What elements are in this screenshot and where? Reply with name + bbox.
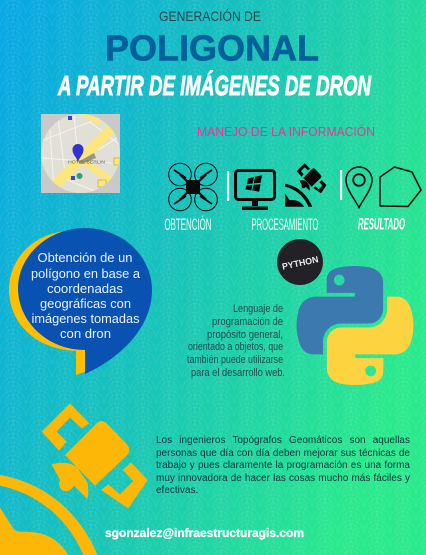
- callout text: polígono en base a: [31, 267, 140, 281]
- paragraph: ingenieros topógrafos: muy innovadora de hacer las cosas mucho más fáciles y: [156, 473, 410, 484]
- map image with location pin: HOTEL BERLIN: [68, 160, 105, 164]
- icon: monitor with windows logo: [236, 170, 274, 210]
- paragraph: ingenieros topógrafos: [156, 435, 410, 496]
- contact email: sgonzalez@infraestructuragis.com: [105, 528, 304, 540]
- python description: [187, 303, 285, 379]
- python description: orientado a objetos, que: [188, 341, 283, 353]
- python description: para el desarrollo web.: [191, 367, 285, 379]
- icon: drone: [169, 163, 217, 211]
- title: poligonal: POLIGONAL: [105, 28, 319, 68]
- python description: también puede utilizarse: [187, 354, 283, 366]
- icon: python logo: [297, 266, 413, 385]
- callout text: Obtención de un: [38, 251, 133, 265]
- callout text: con dron: [60, 327, 111, 341]
- paragraph: ingenieros topógrafos: Los ingenieros Topógrafos Geomáticos son aquellas: [156, 435, 410, 446]
- divider: [227, 171, 229, 201]
- infographic canvas: PROCESAMIENTO: [252, 215, 318, 234]
- paragraph: ingenieros topógrafos: personas que día con día deben mejorar sus técnicas de: [156, 448, 410, 459]
- title: generación de: GENERACIÓN DE: [159, 9, 261, 24]
- paragraph: ingenieros topógrafos: efectivas.: [156, 485, 198, 496]
- divider: [340, 170, 342, 200]
- infographic canvas: OBTENCIÓN: [164, 215, 212, 234]
- paragraph: ingenieros topógrafos: trabajo y pues claramente la programación es una forma: [156, 460, 410, 471]
- python description: programación de: [212, 316, 283, 328]
- python description: Lenguaje de: [233, 303, 283, 315]
- callout text: [31, 251, 140, 341]
- callout: speech bubble: [9, 228, 152, 375]
- callout text: coordenadas: [47, 282, 123, 296]
- python description: propósito general,: [207, 329, 283, 341]
- heading: manejo de la información: MANEJO DE LA INFORMACIÓN: [197, 124, 375, 139]
- badge: python: [277, 239, 323, 285]
- icon: polygon: [380, 167, 421, 206]
- icon: location pin: [346, 167, 372, 208]
- icon: large yellow satellite and earth: [0, 403, 148, 555]
- badge: python: PYTHON: [281, 254, 319, 272]
- map image with location pin: [41, 113, 121, 193]
- callout text: geográficas con: [40, 297, 131, 311]
- callout text: imágenes tomadas: [32, 312, 140, 326]
- icon: satellite over earth: [285, 163, 326, 207]
